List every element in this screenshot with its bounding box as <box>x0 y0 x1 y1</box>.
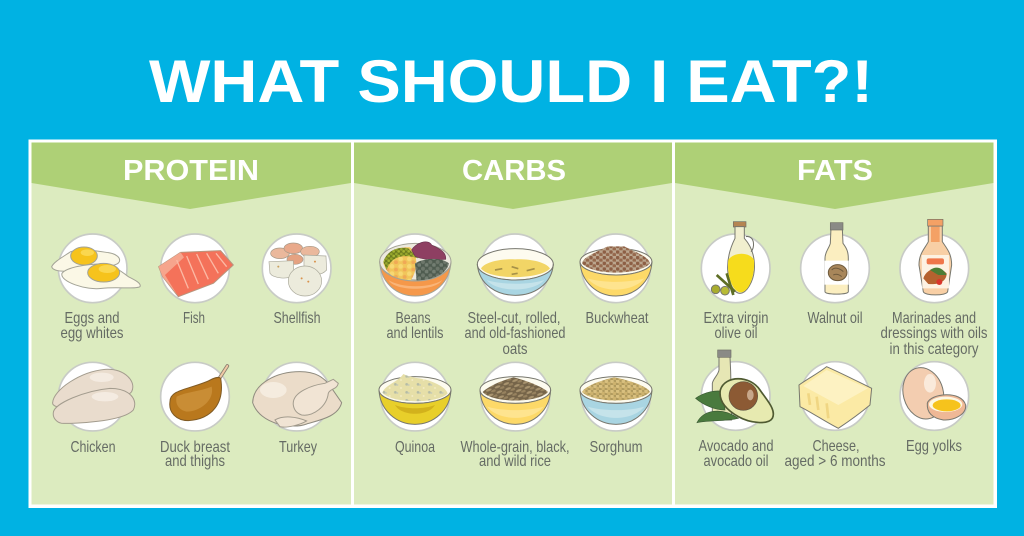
icon: fish <box>159 234 233 303</box>
label: eggs: egg whites <box>60 325 124 342</box>
icon: dressing bottle <box>900 219 969 303</box>
panel: protein <box>32 142 351 504</box>
label: avocado: Avocado and <box>698 438 774 455</box>
label: duck: Duck breast <box>160 439 230 456</box>
label: oats: and old-fashioned <box>464 325 566 342</box>
label: oats: oats <box>502 341 528 358</box>
label: marinades: Marinades and <box>892 310 976 327</box>
icon: rice bowl <box>480 362 551 431</box>
icon: turkey <box>253 362 342 431</box>
label: olive oil: olive oil <box>714 325 758 342</box>
label: fish: Fish <box>183 310 205 327</box>
icon: shellfish <box>262 234 331 303</box>
label: eggs: Eggs and <box>64 310 120 327</box>
label: chicken: Chicken <box>70 439 116 456</box>
label: beans <box>386 310 444 342</box>
title: WHAT SHOULD I EAT?! <box>149 48 873 115</box>
label: sorghum: Sorghum <box>590 439 642 456</box>
icon: quinoa bowl <box>379 362 451 431</box>
label: rice <box>460 439 570 470</box>
label: marinades <box>880 310 988 358</box>
icon: oats bowl <box>477 234 553 303</box>
icon: avocado <box>696 350 773 430</box>
label: cheese <box>784 438 886 470</box>
label: egg yolks: Egg yolks <box>906 438 962 455</box>
label: duck: and thighs <box>165 453 225 470</box>
label: avocado: avocado oil <box>704 453 768 470</box>
label: marinades: dressings with oils <box>880 325 988 342</box>
label: beans: Beans <box>396 310 430 327</box>
label: beans: and lentils <box>386 325 444 342</box>
label: shellfish: Shellfish <box>274 310 320 327</box>
label: cheese: aged > 6 months <box>784 453 886 470</box>
icon: eggs <box>52 234 140 303</box>
heading: fats: FATS <box>797 155 873 187</box>
label: rice: and wild rice <box>479 453 551 470</box>
label: walnut oil: Walnut oil <box>808 310 862 327</box>
icon: egg yolks <box>897 362 969 430</box>
icon: duck leg <box>161 362 229 431</box>
panel: carbs <box>354 142 672 504</box>
label: cheese: Cheese, <box>812 438 860 455</box>
heading: protein: PROTEIN <box>123 155 259 187</box>
panel: fats <box>675 142 994 504</box>
icon: chicken <box>53 362 135 431</box>
icon: buckwheat bowl <box>580 234 652 303</box>
table frame <box>28 140 997 508</box>
label: olive oil: Extra virgin <box>704 310 768 327</box>
heading band: protein <box>32 142 351 209</box>
label: quinoa: Quinoa <box>395 439 435 456</box>
label: oats <box>464 310 566 358</box>
heading band: fats <box>675 142 994 209</box>
label: marinades: in this category <box>890 341 978 358</box>
label: turkey: Turkey <box>279 439 317 456</box>
heading band: carbs <box>354 142 672 209</box>
heading: carbs: CARBS <box>462 155 566 187</box>
label: olive oil <box>704 310 768 342</box>
label: avocado <box>698 438 774 470</box>
label: oats: Steel-cut, rolled, <box>468 310 560 327</box>
label: buckwheat: Buckwheat <box>586 310 649 327</box>
label: eggs <box>60 310 124 342</box>
icon: sorghum bowl <box>580 362 652 431</box>
icon: walnut oil <box>801 223 869 303</box>
icon: olive oil <box>701 222 770 303</box>
icon: beans bowl <box>380 234 451 303</box>
label: duck <box>160 439 230 470</box>
label: rice: Whole-grain, black, <box>460 439 570 456</box>
icon: cheese <box>799 362 872 430</box>
